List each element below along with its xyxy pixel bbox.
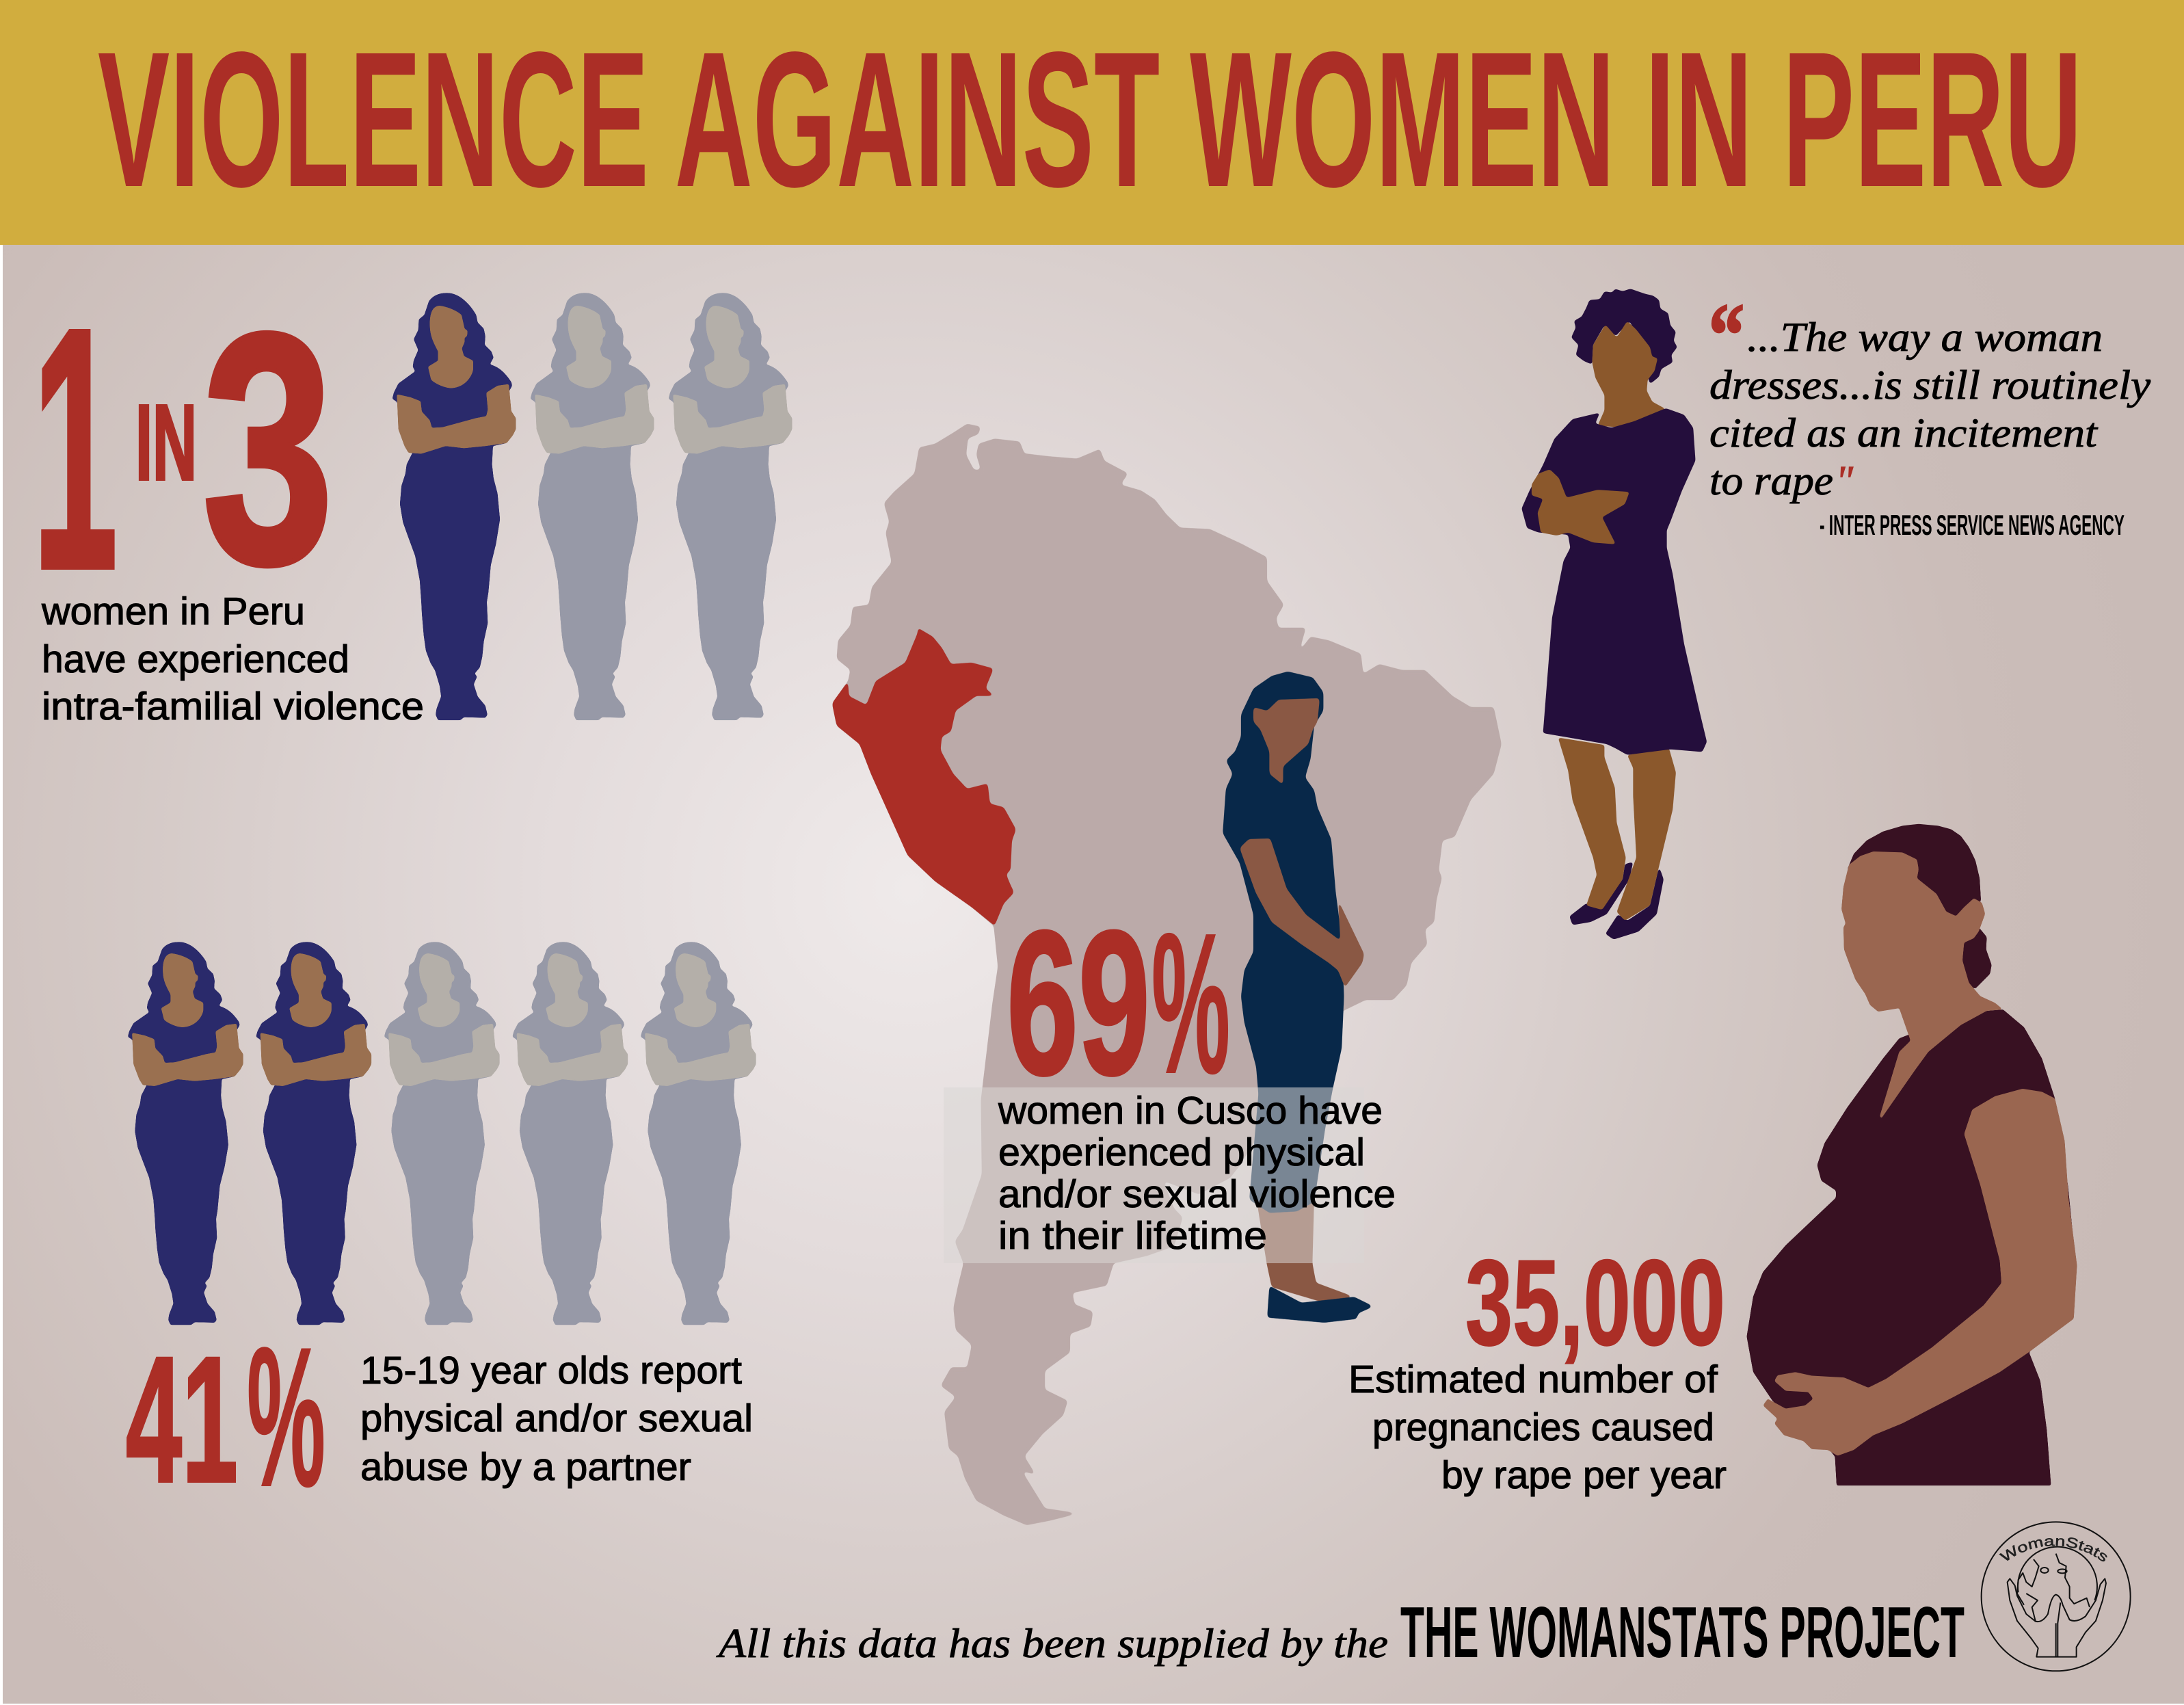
text: women in Cusco: women in Cusco have [998, 1089, 1383, 1133]
text: women in Cusco: experienced physical [998, 1131, 1365, 1174]
footer credit [716, 1592, 1965, 1673]
figure: pregnant woman [1746, 824, 2077, 1485]
text: 15-19 year olds [360, 1349, 753, 1489]
number 1 in 3: IN [135, 383, 197, 503]
number 1 in 3: 1 [33, 257, 118, 639]
text: women in Peru [41, 590, 424, 728]
text backing panel [944, 1087, 1364, 1263]
number 1 in 3 [33, 257, 334, 639]
pictogram: 1 of 3 women [392, 293, 792, 720]
map of South America [832, 424, 1502, 1525]
quote: ...The way a woman [1747, 315, 2103, 360]
quote: cited as an incitement [1709, 410, 2098, 455]
number 35,000: 35,000 [1465, 1234, 1725, 1371]
quote: to rape [1709, 458, 1833, 503]
text: women in Peru: have experienced [42, 637, 349, 681]
footer credit: All this data has been supplied by the [716, 1621, 1388, 1666]
text: 15-19 year olds: 15-19 year olds report [360, 1349, 742, 1392]
logo: WomanStats: WomanStats [1999, 1537, 2107, 1562]
text: estimated pregnancies: by rape per year [1441, 1453, 1727, 1497]
text: women in Cusco: in their lifetime [998, 1214, 1267, 1258]
text: estimated pregnancies [1348, 1358, 1727, 1497]
title banner [0, 0, 2184, 245]
text: women in Cusco: and/or sexual violence [998, 1172, 1396, 1216]
text: women in Peru: intra-familial violence [42, 685, 424, 728]
text: 15-19 year olds: abuse by a partner [360, 1445, 691, 1489]
stat: 35,000 [1348, 1234, 1727, 1497]
Peru highlighted [832, 628, 1016, 926]
text: 15-19 year olds: physical and/or sexual [360, 1397, 753, 1440]
closing quote mark: " [1835, 458, 1854, 505]
stat: 69 percent [998, 888, 1396, 1258]
figure: woman in profile [1223, 672, 1374, 1323]
quote: dresses...is still routinely [1709, 362, 2150, 408]
quote [1709, 286, 2150, 541]
logo: WomanStats [1980, 1521, 2131, 1671]
number 41%: 41 [126, 1319, 238, 1520]
stat: 69 percent: % [1151, 892, 1230, 1115]
number 1 in 3: 3 [202, 265, 334, 632]
stat: 1 in 3 [33, 257, 792, 728]
text: estimated pregnancies: Estimated number of [1348, 1358, 1718, 1401]
text: women in Cusco [998, 1089, 1396, 1258]
text: women in Peru: women in Peru [41, 590, 305, 633]
continent [832, 424, 1502, 1525]
number 69%: 69 [1007, 888, 1150, 1118]
figure: woman in dress [1521, 289, 1707, 940]
text: estimated pregnancies: pregnancies caused [1372, 1405, 1714, 1449]
stat: 41 percent: % [247, 1306, 325, 1528]
opening quote mark: “ [1709, 286, 1744, 384]
stat: 41 percent [126, 942, 756, 1528]
pictogram: 2 of 5 women [128, 942, 756, 1325]
